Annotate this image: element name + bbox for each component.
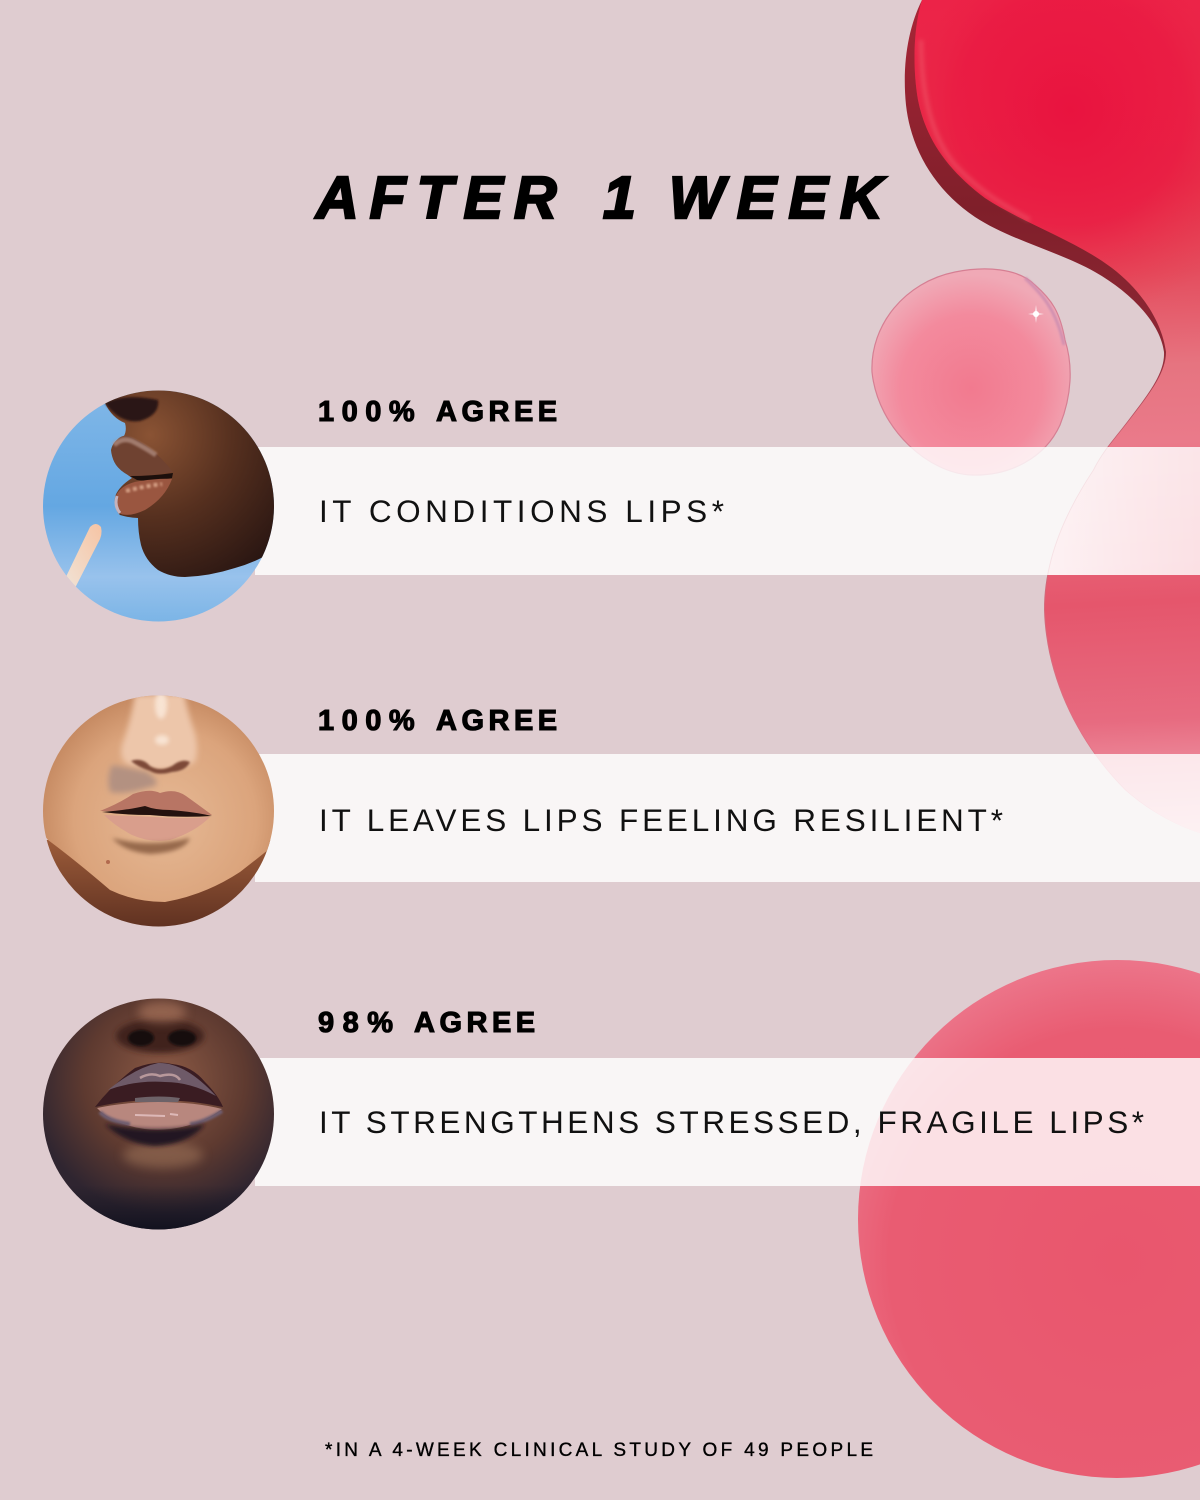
decorative bottom-right large blob (858, 960, 1200, 1478)
row 2 heading: 100% (318, 705, 422, 737)
band: row 1 (255, 447, 1200, 575)
row 2 heading: AGREE (436, 705, 562, 737)
decorative small pink droplet (872, 269, 1070, 475)
title: WEEK (669, 165, 895, 231)
photo: lips and nose, light skin (40, 690, 280, 930)
row 3 heading: AGREE (414, 1007, 540, 1039)
row 3 heading: 98% (318, 1007, 402, 1039)
decorative pale edge of the red blob inside the first band (1048, 456, 1116, 575)
row 1 heading: AGREE (436, 396, 562, 428)
row 1 statement: IT CONDITIONS LIPS* (319, 493, 724, 529)
photo: lips in profile against blue sky (40, 385, 285, 624)
band: row 2 (255, 754, 1200, 882)
band: row 3 (255, 1058, 1200, 1186)
footnote: *IN A 4-WEEK CLINICAL STUDY OF 49 PEOPLE (325, 1440, 873, 1461)
decorative top-right gloss blob (900, 0, 1200, 833)
title: AFTER (314, 165, 568, 231)
row 3 statement: IT STRENGTHENS STRESSED, FRAGILE LIPS* (319, 1104, 1144, 1140)
title: 1 (603, 165, 636, 231)
photo: glossy lips, dark skin (40, 995, 280, 1235)
row 1 heading: 100% (318, 396, 422, 428)
row 2 statement: IT LEAVES LIPS FEELING RESILIENT* (319, 802, 1003, 838)
